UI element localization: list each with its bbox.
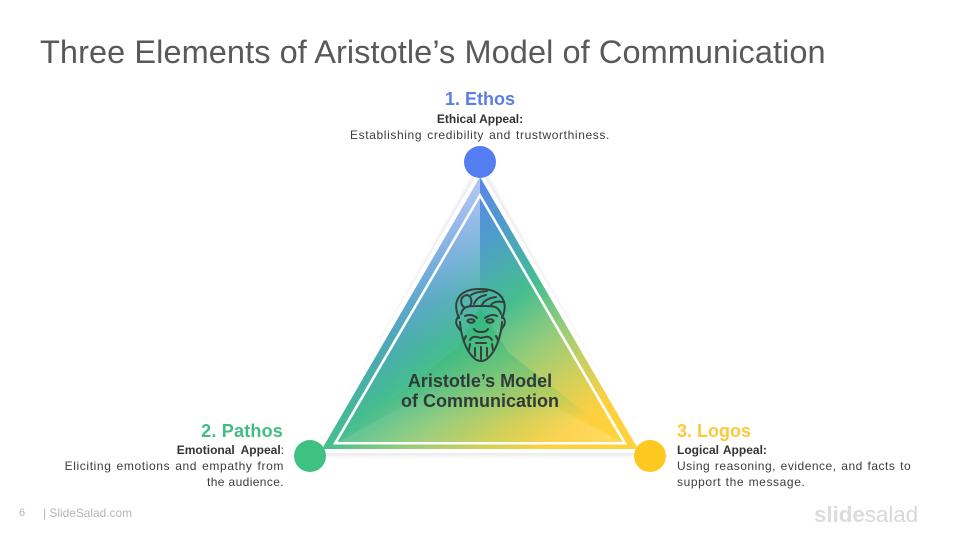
centre label [401,371,559,411]
centre label: of Communication [401,391,559,411]
body: Pathos: the audience. [207,475,284,489]
triangle soft shadow [318,167,642,454]
body: Ethos: Establishing credibility and trustworthiness. [350,128,610,142]
body: Pathos [65,443,284,489]
body: Ethos [350,112,610,142]
heading: Pathos: 2. Pathos [201,421,283,441]
body: Logos: support the message. [677,475,805,489]
body: Ethos: Ethical Appeal: [437,112,523,126]
body: Logos: Logical Appeal: [677,443,767,457]
circle: Ethos [464,146,496,178]
body: Logos [677,443,911,489]
centre label: Aristotle’s Model [408,371,552,391]
white halo [314,169,646,453]
circle: Pathos [294,440,326,472]
centre facets [338,307,622,442]
heading: Ethos: 1. Ethos [445,89,515,109]
page number: 6 [19,507,25,519]
icon: Aristotle head [456,289,505,361]
heading: Logos: 3. Logos [677,421,751,441]
inner white outlined triangle [333,193,627,444]
outer triangle band [322,177,638,449]
text block: Pathos [65,421,284,489]
logo wordmark: slidesalad [814,502,918,527]
title: Three Elements of Aristotle’s Model of Communication [40,34,826,70]
text block: Logos [677,421,911,489]
circle: Logos [634,440,666,472]
body: Pathos: Eliciting emotions and empathy from [65,459,284,473]
body: Logos: Using reasoning, evidence, and facts to [677,459,911,473]
footer source: | SlideSalad.com [43,506,132,520]
body: Pathos: Emotional Appeal: [177,443,284,457]
text block: Ethos [350,89,610,142]
